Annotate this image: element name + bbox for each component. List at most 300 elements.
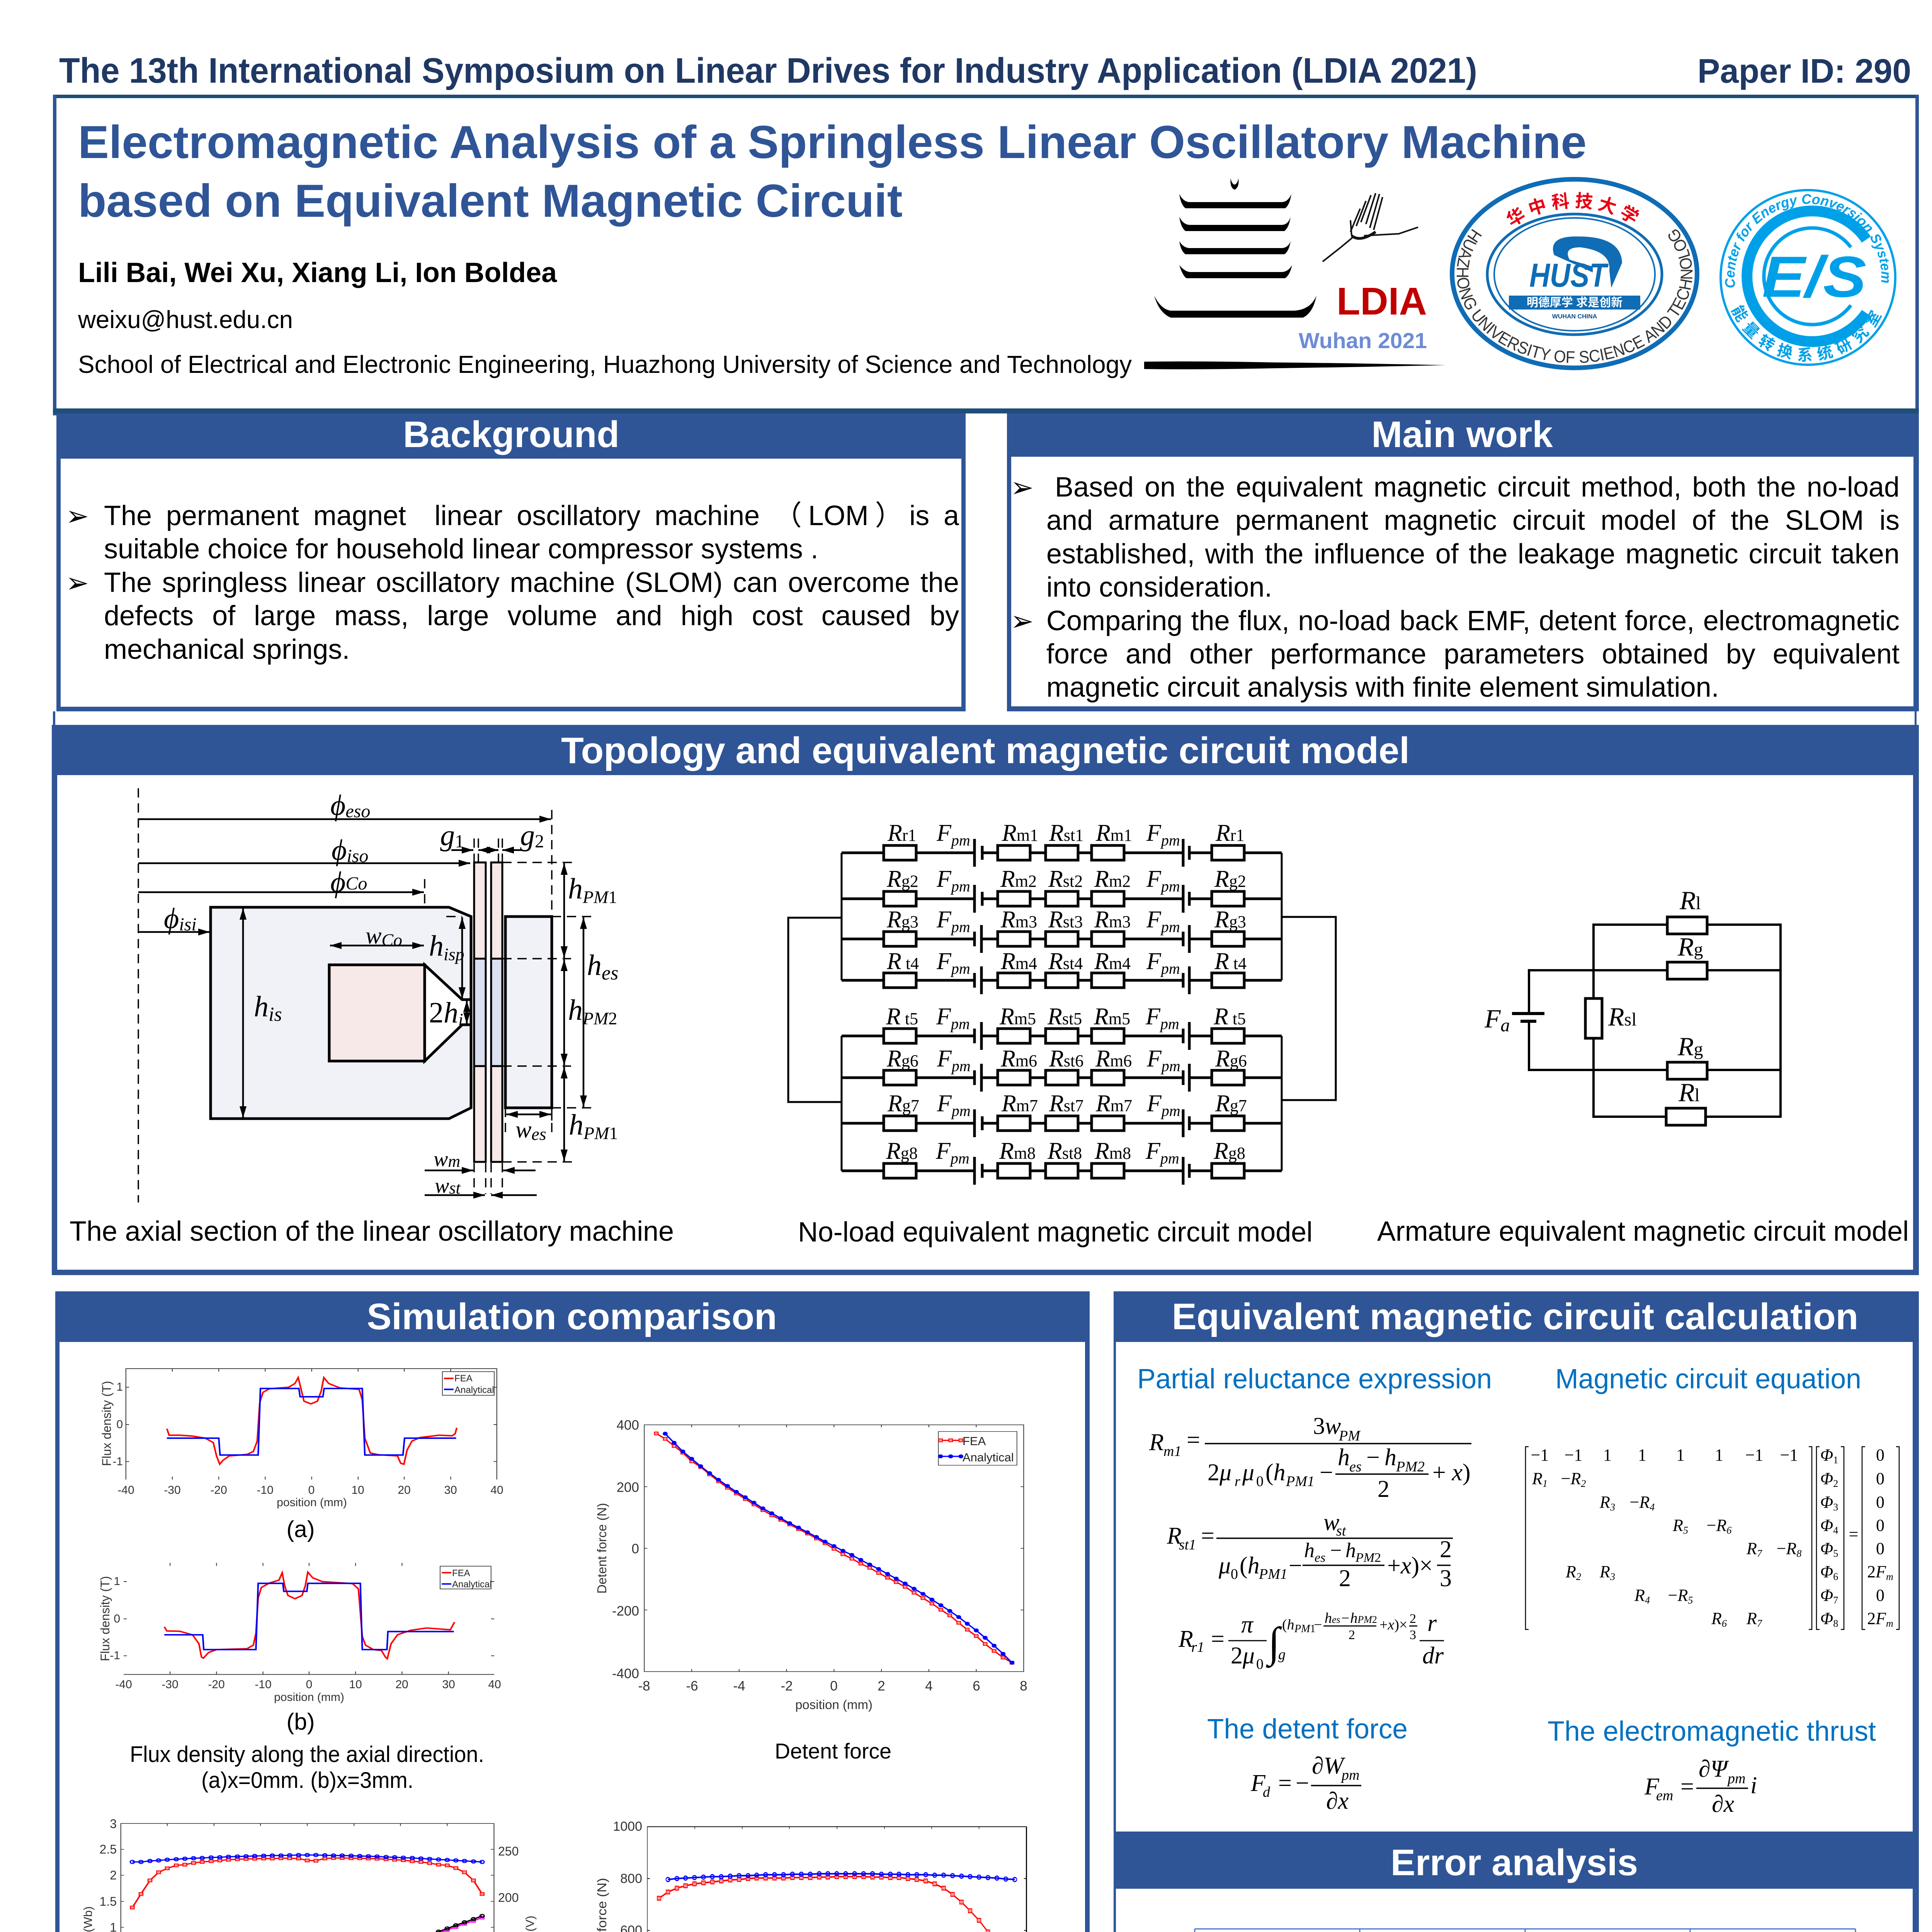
formula: magnetic circuit matrix: R xyxy=(1634,1586,1645,1605)
formula: R_r1: +x)× xyxy=(1379,1617,1407,1633)
circuit rows xyxy=(842,839,1282,867)
dimension labels: ϕ xyxy=(330,866,345,898)
diagram: no-load equivalent magnetic circuit xyxy=(788,820,1336,1185)
dimension labels: w xyxy=(435,1174,449,1198)
formula: R_r1: 2 xyxy=(1410,1612,1416,1626)
row labels 5: pm xyxy=(950,1015,970,1032)
formula: R_r1: 2μ xyxy=(1231,1643,1255,1669)
chart: detent force: Analytical xyxy=(963,1451,1014,1464)
formula: magnetic circuit matrix: m xyxy=(1886,1571,1893,1582)
row labels 3: Rm3 xyxy=(1000,906,1037,933)
logo: energy conversion center xyxy=(1721,190,1895,365)
formula: R_m1: PM1 xyxy=(1286,1473,1315,1490)
chart: PM flux linkage and back EMF: 200 xyxy=(498,1891,519,1905)
formula: magnetic circuit matrix: 2 xyxy=(1833,1478,1838,1489)
heading: topology: Topology and equivalent magnetic circuit model xyxy=(561,730,1410,771)
formula: magnetic circuit matrix: −R xyxy=(1630,1493,1650,1512)
formula: R_r1: = xyxy=(1211,1626,1225,1652)
formula: magnetic circuit matrix: R xyxy=(1565,1562,1576,1581)
chart: flux density (a): 20 xyxy=(398,1484,411,1497)
crane xyxy=(1323,193,1418,262)
chart: detent force: 8 xyxy=(1020,1679,1027,1694)
logo: HUST university seal: HUST xyxy=(1529,257,1609,294)
formula: detent force xyxy=(1250,1753,1361,1814)
formula: magnetic circuit matrix: R xyxy=(1599,1562,1610,1581)
formula: magnetic circuit matrix: −1 xyxy=(1745,1446,1763,1464)
subheading: detent force: The detent force xyxy=(1207,1714,1408,1745)
outer stator xyxy=(505,917,552,1108)
formula: R_st1 xyxy=(1167,1509,1453,1592)
dimension labels: h xyxy=(587,949,602,981)
dimension labels: st xyxy=(449,1179,461,1197)
chart: flux density (a): -10 xyxy=(257,1484,274,1497)
poster title: Electromagnetic Analysis of a Springless Linear Oscillatory Machine xyxy=(78,116,1587,168)
dimension labels: h xyxy=(429,930,444,962)
row labels 6 xyxy=(886,1046,1247,1075)
formula: R_m1: μ xyxy=(1242,1459,1254,1486)
text: main work bullets: and armature permanent magnetic circuit model of the SLOM is xyxy=(1046,505,1900,536)
formula: detent force: F xyxy=(1250,1770,1266,1796)
formula: R_r1: dr xyxy=(1422,1643,1444,1669)
formula: R_st1: h xyxy=(1345,1539,1356,1562)
row labels 7: F xyxy=(937,1090,952,1117)
row labels 3: pm xyxy=(950,918,970,935)
formula: magnetic circuit matrix: 3 xyxy=(1610,1571,1615,1582)
formula: magnetic circuit matrix: 2F xyxy=(1867,1609,1886,1628)
chart: PM flux linkage and back EMF xyxy=(81,1817,537,1932)
chart: flux density (b): 40 xyxy=(488,1678,501,1691)
row labels 5 xyxy=(886,1003,1246,1032)
panel: topology xyxy=(52,711,1919,1275)
text: main work bullets: into consideration. xyxy=(1046,572,1272,603)
formula: R_m1: = xyxy=(1187,1427,1200,1453)
row labels 5: pm xyxy=(1159,1015,1179,1032)
formula: magnetic circuit matrix: Φ xyxy=(1820,1446,1833,1464)
caption: (b): (b) xyxy=(286,1709,315,1735)
formula: magnetic circuit matrix: 5 xyxy=(1688,1595,1693,1606)
chart: detent force: FEA xyxy=(963,1434,986,1448)
formula: magnetic circuit matrix: 0 xyxy=(1876,1586,1884,1605)
formula: magnetic circuit matrix: 1 xyxy=(1603,1446,1612,1464)
chart: electromagnetic force: 800 xyxy=(620,1871,642,1886)
chart: flux density (b): -1 xyxy=(110,1649,120,1662)
conference name: The 13th International Symposium on Linear Drives for Industry Application (LDIA 2021) xyxy=(59,51,1477,90)
text: background bullets: defects of large mass, large volume and high cost caused by xyxy=(104,600,959,631)
chart: detent force: 0 xyxy=(830,1679,838,1694)
chart: detent force: 4 xyxy=(925,1679,933,1694)
row labels 1: Rst1 xyxy=(1049,820,1083,846)
formula: magnetic circuit matrix: R xyxy=(1532,1469,1543,1488)
caption: flux density: (a)x=0mm. (b)x=3mm. xyxy=(201,1768,413,1793)
formula: R_m1: h xyxy=(1338,1444,1350,1471)
caption: detent force: Detent force xyxy=(775,1739,891,1763)
logo: energy conversion center: E/S xyxy=(1762,244,1866,309)
row labels 5: R t5 xyxy=(886,1003,918,1030)
row labels 5: F xyxy=(1145,1003,1161,1030)
formula: R_r1: 3 xyxy=(1410,1628,1416,1642)
text: background bullets: suitable choice for household linear compressor systems . xyxy=(104,534,818,565)
dimension labels: ϕ xyxy=(332,834,347,866)
formula: magnetic circuit matrix: 8 xyxy=(1833,1618,1838,1629)
row labels 8: Rg8 xyxy=(886,1138,918,1164)
chart: flux density (a): FEA xyxy=(454,1373,473,1384)
subheading: partial reluctance: Partial reluctance expression xyxy=(1137,1364,1492,1395)
row labels 4: F xyxy=(936,948,952,975)
bullet 2: ➢ xyxy=(66,566,89,599)
dimension labels: isi xyxy=(179,914,197,935)
chart: flux density (a): position (mm) xyxy=(277,1496,347,1509)
formula: magnetic circuit matrix: 4 xyxy=(1833,1525,1838,1536)
formula: R_r1: ∫ xyxy=(1266,1619,1282,1668)
chart: detent force: -200 xyxy=(612,1604,639,1619)
formula: R_st1: (h xyxy=(1240,1553,1260,1579)
row labels 4: R t4 xyxy=(886,948,919,975)
row labels 2: F xyxy=(1146,866,1162,892)
row labels 1: Rm1 xyxy=(1002,820,1038,846)
dimension labels: h xyxy=(568,994,583,1026)
circuit labels xyxy=(1484,886,1703,1107)
text: background bullets: mechanical springs. xyxy=(104,634,350,665)
chart: flux density (a): 0 xyxy=(116,1418,123,1431)
formula: magnetic circuit matrix: 6 xyxy=(1726,1525,1731,1536)
text: main work bullets: Based on the equivalent magnetic circuit method, both the no-load xyxy=(1055,472,1900,503)
formula: magnetic circuit matrix: 1 xyxy=(1638,1446,1646,1464)
dimension labels: w xyxy=(434,1147,448,1171)
formula: detent force: ∂W xyxy=(1312,1753,1346,1779)
row labels 4: Rm4 xyxy=(1094,948,1131,975)
formula: magnetic circuit matrix: 5 xyxy=(1683,1525,1688,1536)
dimension labels: h xyxy=(254,990,269,1023)
formula: magnetic circuit matrix: Φ xyxy=(1820,1539,1833,1558)
row labels 4 xyxy=(886,948,1247,977)
formula: magnetic circuit matrix: m xyxy=(1886,1618,1893,1629)
circuit labels: Rsl xyxy=(1608,1002,1637,1031)
caption: axial section: The axial section of the linear oscillatory machine xyxy=(70,1216,674,1247)
row labels 7: Rg7 xyxy=(887,1090,919,1117)
logo text: LDIA xyxy=(1299,280,1427,353)
chart: PM flux linkage and back EMF: 3 xyxy=(110,1817,117,1831)
dimension labels: 2 xyxy=(535,831,544,852)
chart: flux density (b): 0 xyxy=(114,1612,120,1625)
chart: electromagnetic force: 1000 xyxy=(613,1819,642,1834)
row labels 2: F xyxy=(936,866,952,892)
formula: R_r1: r xyxy=(1427,1610,1437,1636)
chart: flux density (b): 10 xyxy=(349,1678,362,1691)
mover magnets xyxy=(474,862,486,1162)
panel: main work xyxy=(1007,413,1919,711)
formula: R_m1: 2 xyxy=(1378,1476,1389,1502)
formula: electromagnetic thrust xyxy=(1644,1756,1757,1817)
formula: magnetic circuit matrix: 0 xyxy=(1876,1469,1884,1488)
row labels 2: Rg2 xyxy=(886,866,918,892)
dimension labels xyxy=(164,789,618,1198)
chart: flux density (a): Flux density (T) xyxy=(100,1381,114,1466)
dimension labels: g xyxy=(520,819,535,852)
dimension labels: 2h xyxy=(429,997,458,1029)
row labels 2: Rm2 xyxy=(1094,866,1131,892)
row labels 6: Rst6 xyxy=(1049,1046,1083,1072)
formula: R_st1: = xyxy=(1201,1523,1214,1549)
dimension labels: w xyxy=(366,923,381,949)
text: main work bullets: Comparing the flux, no-load back EMF, detent force, electromagnetic xyxy=(1046,605,1900,636)
formula: R_m1: − xyxy=(1366,1444,1380,1471)
text: background bullets: The permanent magnet linear oscillatory machine （LOM）is a xyxy=(104,500,959,531)
row labels 8 xyxy=(886,1138,1245,1167)
dimension labels: i xyxy=(458,1010,463,1029)
formula: R_m1: PM2 xyxy=(1396,1459,1425,1475)
formula: R_st1: R xyxy=(1167,1523,1182,1549)
row labels 3: F xyxy=(1146,906,1162,933)
row labels 6: Rm6 xyxy=(1000,1046,1037,1072)
caption: flux density xyxy=(130,1742,484,1793)
bullet 2: ➢ xyxy=(1010,605,1034,637)
dimension arrows xyxy=(138,818,551,820)
formula: magnetic circuit matrix: 1 xyxy=(1715,1446,1723,1464)
formula: R_r1: (h xyxy=(1282,1617,1294,1633)
chart: detent force: -400 xyxy=(612,1666,639,1681)
authors: Lili Bai, Wei Xu, Xiang Li, Ion Boldea xyxy=(78,257,557,288)
formula: magnetic circuit matrix: −1 xyxy=(1780,1446,1798,1464)
row labels 7: F xyxy=(1146,1090,1162,1117)
diagram: armature equivalent magnetic circuit xyxy=(1484,886,1781,1125)
chart: flux density (b): -10 xyxy=(255,1678,272,1691)
formula: detent force: pm xyxy=(1340,1767,1359,1783)
formula: R_r1: hes−hPM2 xyxy=(1325,1610,1377,1626)
chart: detent force: Detent force (N) xyxy=(595,1503,609,1594)
chart: detent force: 6 xyxy=(973,1679,980,1694)
formula: magnetic circuit matrix: 0 xyxy=(1876,1493,1884,1512)
row labels 8: Rm8 xyxy=(1094,1138,1131,1164)
subheading: electromagnetic thrust: The electromagnetic thrust xyxy=(1548,1716,1876,1747)
row labels 8: Rg8 xyxy=(1213,1138,1245,1164)
dimension labels: h xyxy=(568,872,583,905)
formula: R_st1: μ xyxy=(1218,1553,1231,1579)
row labels 3: Rg3 xyxy=(1214,906,1246,933)
row labels 7 xyxy=(887,1090,1247,1119)
text: background bullets: The springless linear oscillatory machine (SLOM) can overcome the xyxy=(104,567,959,598)
formula: magnetic circuit matrix: 2 xyxy=(1581,1478,1586,1489)
formula: magnetic circuit matrix: −1 xyxy=(1565,1446,1582,1464)
row labels 4: Rm4 xyxy=(1000,948,1037,975)
formula: R_m1: 3w xyxy=(1313,1413,1341,1439)
formula: magnetic circuit matrix: R xyxy=(1746,1539,1757,1558)
formula: R_m1: 0 xyxy=(1256,1473,1264,1490)
formula: R_m1: (h xyxy=(1265,1459,1286,1486)
row labels 6: pm xyxy=(1160,1057,1180,1075)
heading: main work: Main work xyxy=(1371,414,1553,455)
chart: flux density (a): -30 xyxy=(164,1484,181,1497)
logo: energy conversion center: 能量转换系统研究室 xyxy=(1728,303,1888,364)
formula: magnetic circuit matrix: 4 xyxy=(1650,1502,1655,1513)
row labels 5: Rm5 xyxy=(1094,1003,1130,1030)
panel: equivalent magnetic circuit calculation xyxy=(1114,1291,1919,1932)
formula: R_r1 xyxy=(1178,1610,1444,1672)
formula: magnetic circuit matrix: Φ xyxy=(1820,1469,1833,1488)
formula: R_st1: PM1 xyxy=(1259,1566,1287,1582)
row labels 3: F xyxy=(936,906,952,933)
row labels 1: F xyxy=(1146,820,1162,846)
panel: title block xyxy=(53,95,1919,415)
row labels 1 xyxy=(887,820,1245,849)
formula: magnetic circuit matrix: Φ xyxy=(1820,1562,1833,1581)
formula: R_m1: m1 xyxy=(1163,1443,1181,1459)
formula: R_r1: 2 xyxy=(1349,1628,1355,1642)
diagram: axial section of the machine xyxy=(138,788,618,1202)
row labels 6: Rm6 xyxy=(1095,1046,1132,1072)
chart: flux density (b): 20 xyxy=(395,1678,408,1691)
text: main work bullets: force and other performance parameters obtained by equivalent xyxy=(1046,639,1900,670)
dimension labels: 1 xyxy=(455,831,464,852)
circuit labels: F xyxy=(1484,1004,1501,1033)
row labels 6: F xyxy=(1146,1046,1162,1072)
chart: flux density (b): Flux density (T) xyxy=(98,1576,112,1661)
logo: HUST university seal: 明德厚学 求是创新 xyxy=(1527,296,1622,309)
formula: magnetic circuit matrix: 1 xyxy=(1833,1454,1838,1466)
row labels 2: pm xyxy=(950,878,970,895)
circuit labels: Rg xyxy=(1677,1032,1703,1061)
heading: error analysis: Error analysis xyxy=(1391,1842,1638,1883)
formula: magnetic circuit matrix: 3 xyxy=(1610,1502,1615,1513)
chart: detent force: 0 xyxy=(632,1541,639,1556)
formula: magnetic circuit matrix: −R xyxy=(1668,1586,1688,1605)
coil xyxy=(329,965,425,1061)
chart: flux density (b) xyxy=(98,1563,501,1704)
logo: LDIA pagoda xyxy=(1144,178,1446,369)
formula: magnetic circuit matrix: 1 xyxy=(1676,1446,1685,1464)
formula: R_m1 xyxy=(1149,1413,1471,1502)
formula: detent force: − xyxy=(1296,1770,1309,1796)
chart: detent force xyxy=(595,1418,1027,1712)
formula: detent force: ∂x xyxy=(1326,1788,1349,1814)
logo text: LDIA: LDIA xyxy=(1337,280,1427,323)
row labels 7: Rm7 xyxy=(1001,1090,1038,1117)
chart: flux density (a): -40 xyxy=(117,1484,134,1497)
panel: simulation comparison xyxy=(55,1291,1090,1932)
chart: flux density (b): -40 xyxy=(115,1678,132,1691)
formula: R_st1: 3 xyxy=(1440,1565,1452,1592)
logo: energy conversion center: Center for Energy Conversion System xyxy=(1722,191,1894,289)
row labels 2: Rst2 xyxy=(1048,866,1083,892)
row labels 8: Rst8 xyxy=(1047,1138,1082,1164)
row labels 8: F xyxy=(935,1138,951,1164)
row labels 5: F xyxy=(936,1003,951,1030)
heading: background: Background xyxy=(403,414,619,455)
chart: flux density (b): FEA xyxy=(452,1568,470,1578)
formula: electromagnetic thrust: = xyxy=(1680,1774,1694,1800)
formula: R_m1: r xyxy=(1235,1473,1240,1490)
row labels 4: F xyxy=(1146,948,1162,975)
formula: R_st1: st1 xyxy=(1179,1537,1196,1553)
chart: flux density (a): 40 xyxy=(490,1484,503,1497)
formula: magnetic circuit matrix: −1 xyxy=(1531,1446,1549,1464)
chart: flux density (a): 1 xyxy=(116,1381,123,1393)
caption: flux density: Flux density along the axial direction. xyxy=(130,1742,484,1767)
chart: detent force: -6 xyxy=(686,1679,698,1694)
formula: magnetic circuit matrix: −R xyxy=(1561,1469,1581,1488)
row labels 1: Rr1 xyxy=(887,820,917,846)
text: main work bullets: magnetic circuit analysis with finite element simulation. xyxy=(1046,672,1719,703)
row labels 3: Rst3 xyxy=(1048,906,1083,933)
text: background bullets xyxy=(66,499,959,666)
row labels 1: pm xyxy=(950,832,970,849)
circuit labels: Rl xyxy=(1678,1078,1700,1107)
formula: R_st1: w xyxy=(1323,1509,1339,1536)
formula: R_m1: 2μ xyxy=(1208,1459,1231,1486)
dimension labels: es xyxy=(602,962,618,984)
formula: R_r1: PM1 xyxy=(1294,1623,1315,1635)
chart: flux density (a): 0 xyxy=(308,1484,315,1497)
formula: R_m1: R xyxy=(1149,1429,1164,1456)
formula: R_st1: es xyxy=(1315,1551,1325,1565)
chart: detent force: -8 xyxy=(638,1679,650,1694)
chart: flux density (b): 1 xyxy=(114,1575,120,1588)
formula: R_m1: es xyxy=(1349,1459,1362,1475)
row labels 8: pm xyxy=(949,1150,969,1167)
chart: flux density (b): Analytical xyxy=(452,1579,492,1590)
dimension labels: iso xyxy=(347,846,368,866)
dimension labels: m xyxy=(448,1152,460,1171)
formula: magnetic circuit matrix: Φ xyxy=(1820,1586,1833,1605)
formula: magnetic circuit matrix: Φ xyxy=(1820,1609,1833,1628)
formula: detent force: d xyxy=(1263,1784,1270,1800)
formula: electromagnetic thrust: i xyxy=(1750,1772,1757,1799)
dimension labels: g xyxy=(440,819,455,852)
formula: R_st1: PM2 xyxy=(1355,1551,1381,1565)
formula: magnetic circuit matrix: 6 xyxy=(1722,1618,1727,1629)
formula: magnetic circuit matrix: 0 xyxy=(1876,1446,1884,1464)
formula: R_r1: − xyxy=(1314,1617,1322,1633)
row labels 7: pm xyxy=(1160,1102,1180,1119)
chart: detent force: 2 xyxy=(878,1679,885,1694)
chart: flux density (b): -30 xyxy=(162,1678,179,1691)
row labels 8: pm xyxy=(1159,1150,1179,1167)
chart: PM flux linkage and back EMF: 2 xyxy=(110,1868,117,1882)
row labels 8: F xyxy=(1145,1138,1161,1164)
dimension labels: 2 xyxy=(608,1009,617,1028)
formula: R_st1: − xyxy=(1330,1539,1342,1562)
row labels 4: pm xyxy=(950,960,970,977)
chart: flux density (b): 0 xyxy=(306,1678,312,1691)
panel: error analysis xyxy=(1114,1832,1919,1889)
logo text: LDIA: Wuhan 2021 xyxy=(1299,328,1427,353)
dimension labels: w xyxy=(515,1117,531,1143)
panel: background xyxy=(56,413,966,711)
formula: R_m1: h xyxy=(1384,1444,1396,1471)
dimension labels: ϕ xyxy=(164,902,179,935)
formula: R_st1: 2 xyxy=(1339,1565,1351,1592)
logo: HUST university seal: 华中科技大学 xyxy=(1503,190,1646,230)
email: weixu@hust.edu.cn xyxy=(78,306,293,333)
dimension labels: PM xyxy=(582,887,609,907)
chart: flux density (a): -20 xyxy=(210,1484,227,1497)
formula: R_r1: 0 xyxy=(1256,1656,1264,1672)
dimension labels: eso xyxy=(345,801,370,821)
formula: magnetic circuit matrix: 7 xyxy=(1757,1618,1762,1629)
chart: detent force: 400 xyxy=(617,1418,639,1433)
formula: detent force: = xyxy=(1278,1770,1292,1796)
row labels 3: pm xyxy=(1160,918,1180,935)
row labels 5: Rst5 xyxy=(1047,1003,1082,1030)
row labels 5: R t5 xyxy=(1213,1003,1246,1030)
formula: magnetic circuit matrix: 2 xyxy=(1576,1571,1581,1582)
chart: detent force: 200 xyxy=(617,1480,639,1495)
formula: R_r1: R xyxy=(1178,1626,1193,1652)
row labels 6: F xyxy=(937,1046,952,1072)
bullet 1: ➢ xyxy=(1010,471,1034,503)
poster title: based on Equivalent Magnetic Circuit xyxy=(78,175,903,227)
row labels 1: pm xyxy=(1160,832,1180,849)
heading: calculation: Equivalent magnetic circuit calculation xyxy=(1172,1296,1858,1337)
